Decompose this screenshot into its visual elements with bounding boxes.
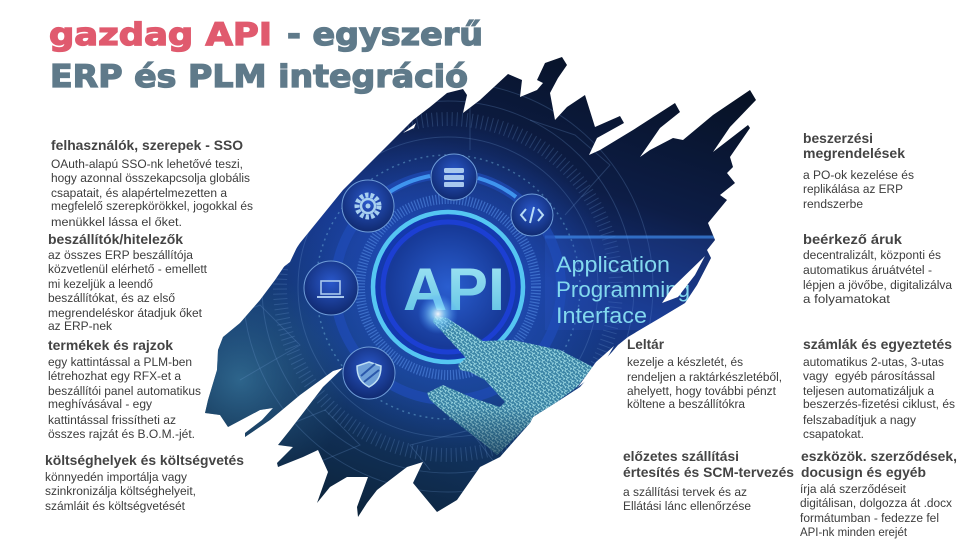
text block: számlák és egyeztetés: csapatokat. [803, 427, 864, 441]
text block: felhasználók, szerepek - SSO [51, 137, 253, 229]
text block: beszállítók/hitelezők: az ERP-nek [48, 319, 113, 333]
text block: felhasználók, szerepek - SSO: csapatait, és alapértelmezetten a [51, 186, 227, 200]
text block: felhasználók, szerepek - SSO: felhasználók, szerepek - SSO [51, 137, 243, 153]
text block: beszállítók/hitelezők: közvetlenül elérhető - emellett [48, 262, 208, 276]
text block: beszállítók/hitelezők: mi kezeljük a leendő [48, 277, 153, 291]
text block: eszközök, szerződések, docusign és egyéb: docusign és egyéb [801, 464, 926, 480]
text block: beérkező áruk: automatikus áruátvétel - [803, 263, 932, 277]
text block: Leltár [627, 336, 782, 411]
title [49, 17, 483, 95]
text block: költséghelyek és költségvetés: számláit és költségvetését [45, 499, 186, 513]
text block: felhasználók, szerepek - SSO: hogy azonnal összekapcsolja globális [51, 171, 250, 185]
text block: előzetes szállítási értesítés és SCM-tervezés: Ellátási lánc ellenőrzése [623, 499, 751, 513]
text block: beérkező áruk: beérkező áruk [803, 231, 902, 247]
text block: előzetes szállítási értesítés és SCM-tervezés: értesítés és SCM-tervezés [623, 464, 794, 480]
text block: beszállítók/hitelezők: megrendeléskor átadjuk őket [48, 306, 203, 320]
text block: beszállítók/hitelezők: beszállítók/hitelezők [48, 231, 183, 247]
text block: számlák és egyeztetés: automatikus 2-utas, 3-utas [803, 355, 944, 369]
text block: számlák és egyeztetés: számlák és egyeztetés [803, 336, 952, 352]
icon: laptop [304, 261, 358, 315]
title: - egyszerű [287, 17, 483, 53]
light band behind label [545, 237, 725, 330]
text block: Leltár: kezelje a készletét, és [627, 355, 743, 369]
text block: előzetes szállítási értesítés és SCM-tervezés [623, 448, 794, 513]
text block: Leltár: Leltár [627, 336, 665, 352]
text block: beérkező áruk: a folyamatokat [803, 292, 891, 306]
text block: eszközök, szerződések, docusign és egyéb: eszközök. szerződések, [801, 448, 957, 464]
text block: eszközök, szerződések, docusign és egyéb: API-nk minden erejét [800, 525, 908, 539]
text block: felhasználók, szerepek - SSO: megfelelő szerepkörökkel, jogokkal és [51, 199, 253, 213]
icon: gear [342, 180, 394, 232]
icon: server [431, 154, 477, 200]
text block: számlák és egyeztetés: vagy egyéb párosítással [803, 369, 935, 383]
text block: előzetes szállítási értesítés és SCM-tervezés: a szállítási tervek és az [623, 485, 747, 499]
text block: költséghelyek és költségvetés: költséghelyek és költségvetés [45, 452, 244, 468]
text block: beszerzési megrendelések: rendszerbe [803, 197, 863, 211]
icon: shield [343, 347, 395, 399]
text block: beszállítók/hitelezők [48, 231, 208, 333]
label: Application Programming Interface: Interface [556, 303, 647, 328]
title: gazdag API [49, 17, 272, 53]
label: Application Programming Interface: Application [556, 252, 670, 277]
text block: beszállítók/hitelezők: beszállítókat, és az első [48, 291, 175, 305]
label: Application Programming Interface [556, 256, 689, 323]
torn white slits [277, 123, 705, 387]
text block: számlák és egyeztetés [803, 336, 955, 441]
text block: termékek és rajzok: kattintással frissítheti az [48, 413, 176, 427]
text block: számlák és egyeztetés: teljesen automatizáljuk a [803, 384, 934, 398]
label: Application Programming Interface: Programming [556, 277, 690, 302]
text block: termékek és rajzok: beszállítói panel automatikus [48, 384, 201, 398]
text block: beérkező áruk: decentralizált, központi és [803, 248, 941, 262]
text block: termékek és rajzok: összes rajzát és B.O.M.-jét. [48, 427, 195, 441]
text block: számlák és egyeztetés: beszerzés-fizetési ciklust, és [803, 397, 955, 411]
icon: code [511, 194, 553, 236]
text block: termékek és rajzok: termékek és rajzok [48, 337, 173, 353]
text block: előzetes szállítási értesítés és SCM-tervezés: előzetes szállítási [623, 448, 739, 464]
text block: költséghelyek és költségvetés: könnyedén importálja vagy [45, 470, 188, 484]
text block: költséghelyek és költségvetés [45, 452, 244, 513]
text block: Leltár: ahelyett, hogy további pénzt [627, 384, 777, 398]
text block: számlák és egyeztetés: felszabadítjuk a nagy [803, 413, 917, 427]
text block: eszközök, szerződések, docusign és egyéb: formátumban - fedezze fel [800, 511, 939, 525]
text block: termékek és rajzok: egy kattintással a PLM-ben [48, 355, 192, 369]
text block: felhasználók, szerepek - SSO: menükkel lássa el őket. [51, 215, 182, 229]
text block: termékek és rajzok [48, 337, 201, 441]
text block: Leltár: rendeljen a raktárkészletéből, [627, 370, 782, 384]
text block: beérkező áruk [803, 231, 952, 306]
API label: API [403, 256, 505, 323]
text block: eszközök, szerződések, docusign és egyéb [800, 448, 957, 539]
text block: eszközök, szerződések, docusign és egyéb: digitálisan, dolgozza át .docx [800, 496, 953, 510]
text block: felhasználók, szerepek - SSO: OAuth-alapú SSO-nk lehetővé teszi, [51, 157, 243, 171]
brush-stroke API illustration [190, 50, 770, 530]
text block: beszerzési megrendelések: megrendelések [803, 145, 905, 161]
text block: termékek és rajzok: létrehozhat egy RFX-et a [48, 369, 181, 383]
text block: beszerzési megrendelések: a PO-ok kezelése és [803, 168, 914, 182]
text block: beszerzési megrendelések [803, 130, 914, 211]
text block: termékek és rajzok: meghívásával - egy [48, 397, 153, 411]
pointing hand [418, 294, 593, 455]
text block: beszállítók/hitelezők: az összes ERP beszállítója [48, 248, 193, 262]
title: ERP és PLM integráció [50, 59, 468, 95]
text block: beérkező áruk: lépjen a jövőbe, digitalizálva [803, 278, 952, 292]
text block: beszerzési megrendelések: replikálása az ERP [803, 182, 903, 196]
text block: beszerzési megrendelések: beszerzési [803, 130, 873, 146]
API core circle [373, 212, 523, 362]
text block: eszközök, szerződések, docusign és egyéb: írja alá szerződéseit [800, 482, 907, 496]
text block: Leltár: költene a beszállítókra [627, 397, 745, 411]
text block: költséghelyek és költségvetés: szinkronizálja költséghelyeit, [45, 484, 196, 498]
